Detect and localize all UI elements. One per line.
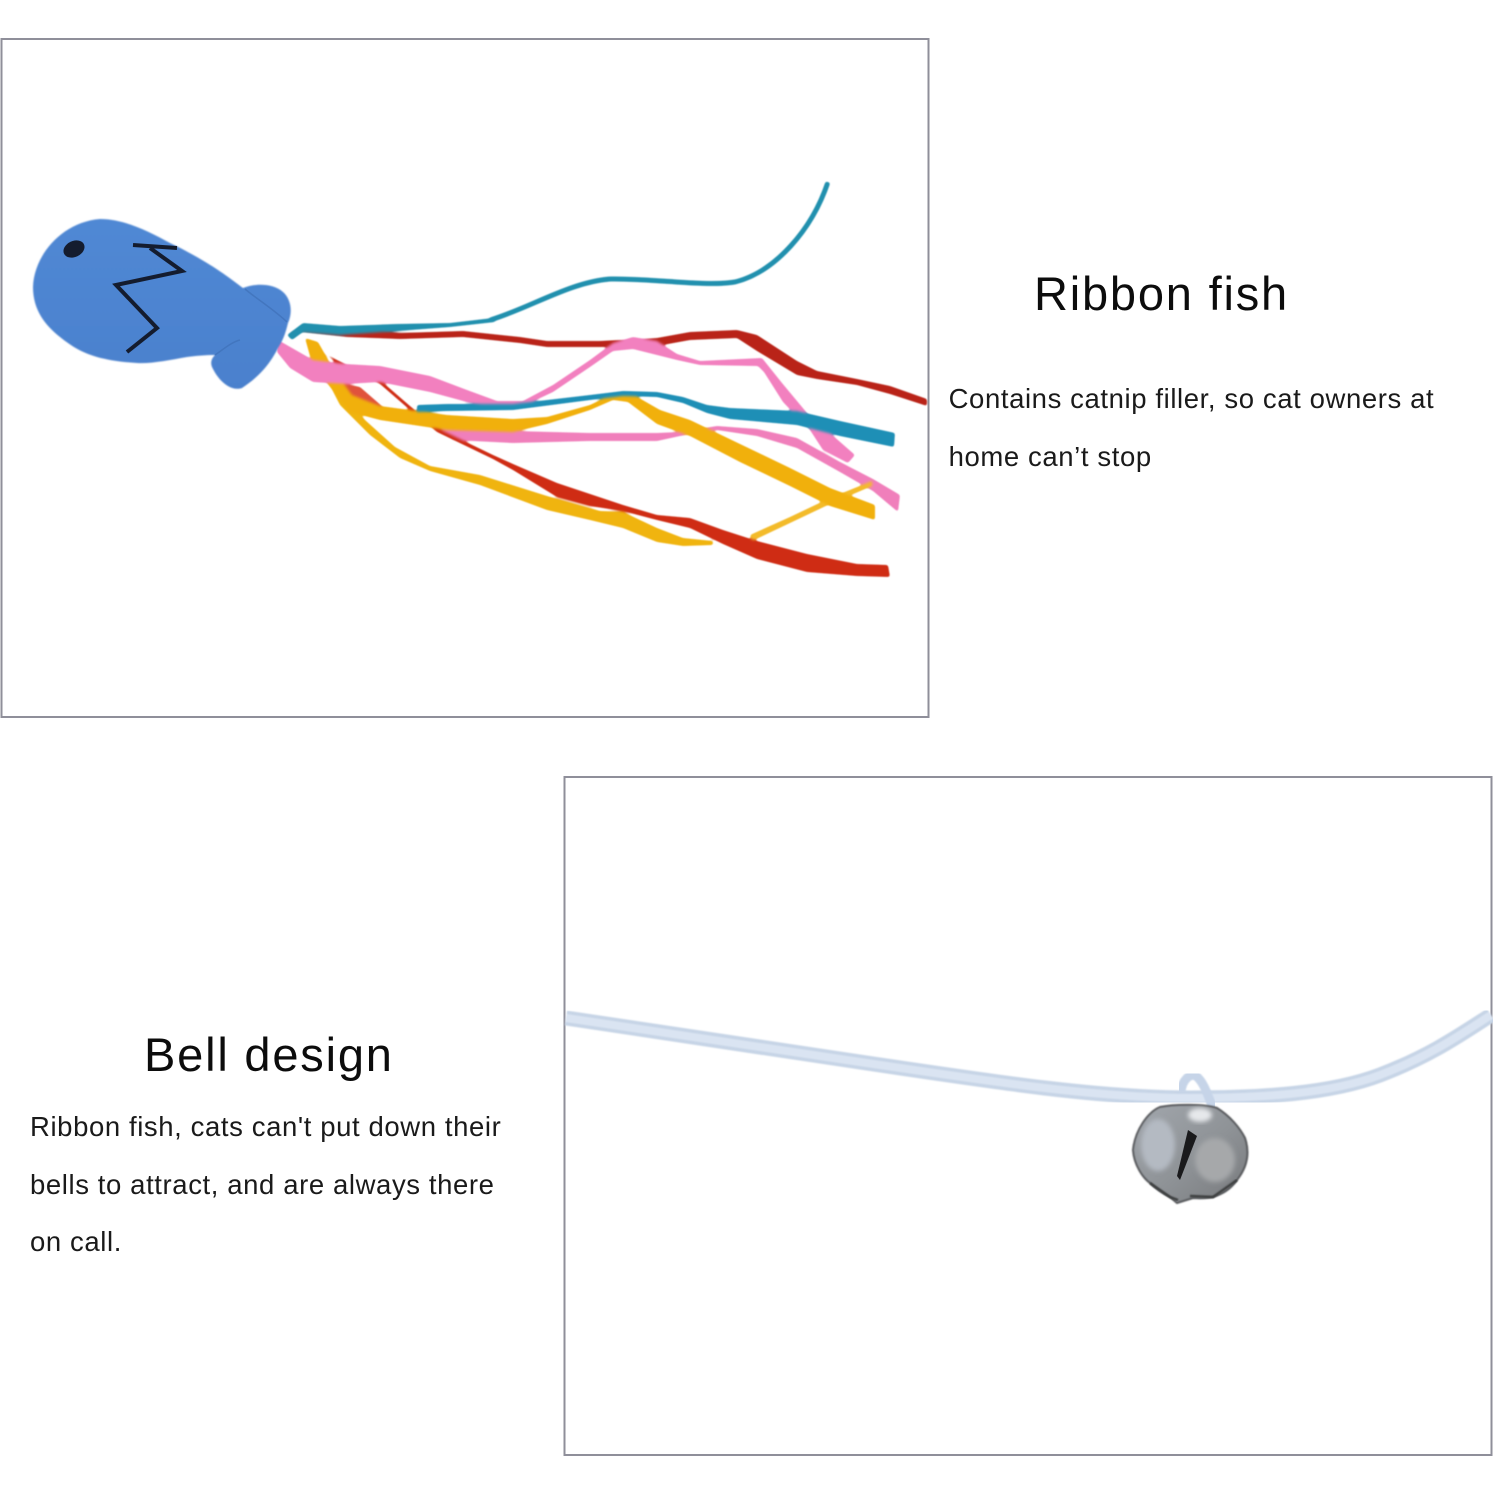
text: ribbon fish description: home can’t stop <box>949 441 1152 472</box>
ribbon: lower yellow <box>323 372 713 546</box>
ribbon: middle teal <box>417 391 895 447</box>
ribbon: big red <box>325 353 890 577</box>
ribbon: upper yellow <box>305 338 875 520</box>
icon: silver bell <box>1133 1075 1247 1203</box>
text: bell design description: bells to attract, and are always there <box>30 1169 495 1200</box>
ribbon: thin teal base <box>287 318 495 340</box>
ribbon: red fold <box>340 383 383 407</box>
panel: ribbon fish photo <box>2 39 928 717</box>
fish fin seam <box>215 289 287 355</box>
ribbon: thin teal strand <box>490 182 828 320</box>
ribbons <box>277 182 927 577</box>
icon: blue plush fish <box>33 219 291 389</box>
bell lower rim <box>1150 1180 1237 1200</box>
ribbon: yellow return strand <box>750 481 872 541</box>
ribbon: upper pink <box>277 337 855 463</box>
bell highlights <box>1141 1119 1175 1171</box>
heading: ribbon fish: Ribbon fish <box>1034 267 1289 320</box>
heading: bell design: Bell design <box>144 1028 394 1081</box>
fish mouth zigzag <box>116 245 182 352</box>
fish eye <box>61 237 87 261</box>
ribbon: lower pink <box>440 426 900 512</box>
panel: bell photo <box>564 777 1492 1455</box>
elastic cord <box>566 1015 1491 1098</box>
bell slit <box>1177 1130 1197 1180</box>
text: bell design description <box>30 1111 501 1257</box>
text: bell design description: on call. <box>30 1226 122 1257</box>
text: bell design description: Ribbon fish, cats can't put down their <box>30 1111 501 1142</box>
ribbon: thin red <box>290 330 927 406</box>
text: ribbon fish description: Contains catnip filler, so cat owners at <box>949 383 1434 414</box>
text: ribbon fish description <box>949 383 1434 472</box>
